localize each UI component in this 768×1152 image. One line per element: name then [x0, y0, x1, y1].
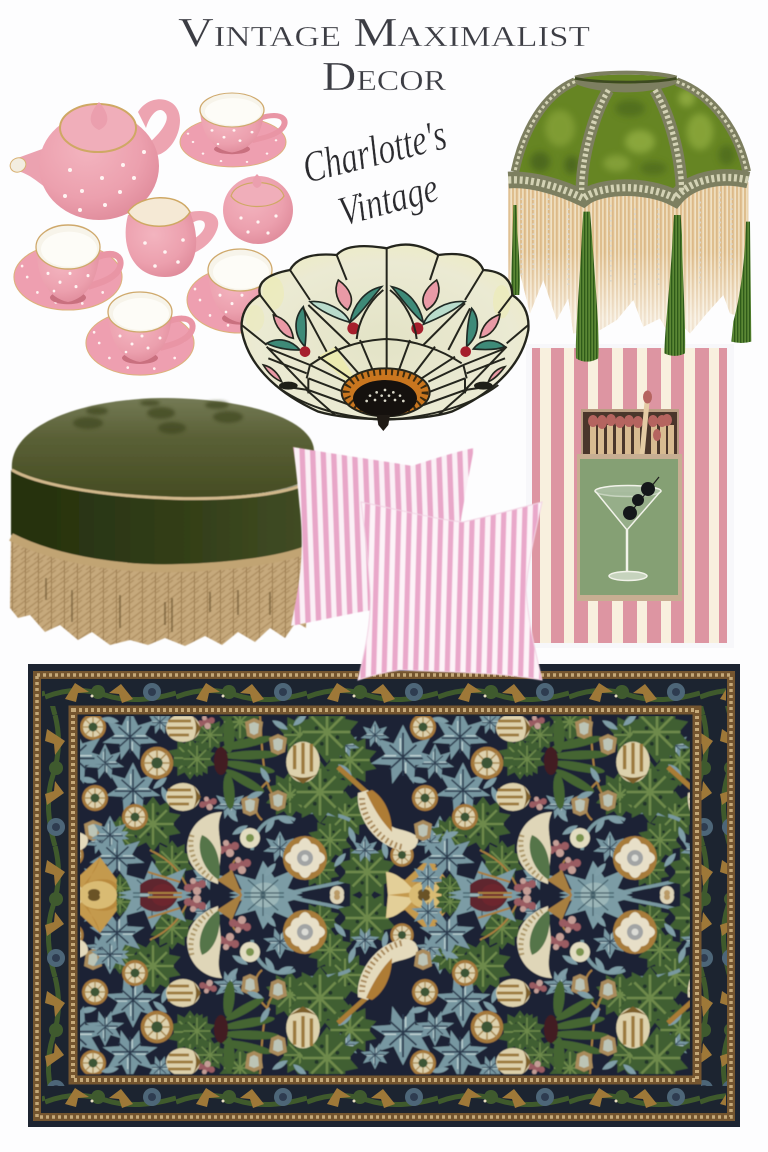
fringe — [508, 182, 748, 333]
tufted velvet ottoman — [10, 398, 314, 646]
red jewels — [300, 322, 471, 357]
matchbox with matches — [581, 390, 679, 455]
amber medallion — [342, 368, 430, 417]
band — [11, 470, 306, 566]
icon: martini glass — [595, 477, 661, 580]
green tassels — [511, 205, 751, 362]
title: Decor — [322, 53, 447, 99]
art print on striped wallpaper — [526, 344, 734, 648]
icon: saucer and cup bottom — [86, 292, 194, 375]
braid trim — [508, 73, 748, 198]
front striped pillow — [358, 502, 542, 680]
back striped pillow — [291, 447, 474, 626]
pink buds — [263, 280, 505, 382]
finial — [377, 415, 390, 431]
icon: sugar bowl — [223, 174, 293, 244]
icon: creamer — [126, 198, 218, 277]
fringe gimp — [11, 537, 306, 568]
lead lines — [242, 248, 528, 420]
velvet dome — [515, 75, 745, 197]
title: Vintage Maximalist — [178, 9, 590, 55]
script logo: Charlotte's Vintage — [298, 110, 451, 236]
tufted dome — [12, 398, 314, 498]
teal leaves — [267, 287, 505, 350]
gold piping — [12, 470, 303, 499]
patterned rug — [0, 664, 768, 1127]
teapot and cups set — [8, 93, 293, 375]
icon: saucer and cup right — [187, 249, 293, 333]
rug border bands — [42, 679, 727, 1113]
twisted fringe — [10, 535, 308, 646]
script logo: Charlotte's Vintage: Charlotte's — [298, 110, 451, 193]
icon: saucer and cup left — [14, 225, 122, 310]
fringed velvet lampshade — [508, 73, 751, 362]
dark gaps in fringe — [46, 578, 270, 632]
icon: saucer and cup top right — [180, 93, 286, 167]
dark rim patches — [279, 382, 493, 390]
green card with martini — [577, 454, 682, 601]
rug floral field — [80, 716, 690, 1075]
rug braided frames — [37, 675, 731, 1117]
tufts — [73, 400, 243, 434]
striped panel — [526, 344, 734, 648]
script logo: Charlotte's Vintage: Vintage — [334, 165, 443, 236]
title — [178, 9, 590, 99]
glass tint panels — [246, 277, 510, 380]
rug base — [28, 664, 740, 1127]
stained glass ceiling lamp — [242, 245, 528, 431]
icon: teapot — [8, 99, 180, 220]
glass bowl — [242, 245, 528, 419]
